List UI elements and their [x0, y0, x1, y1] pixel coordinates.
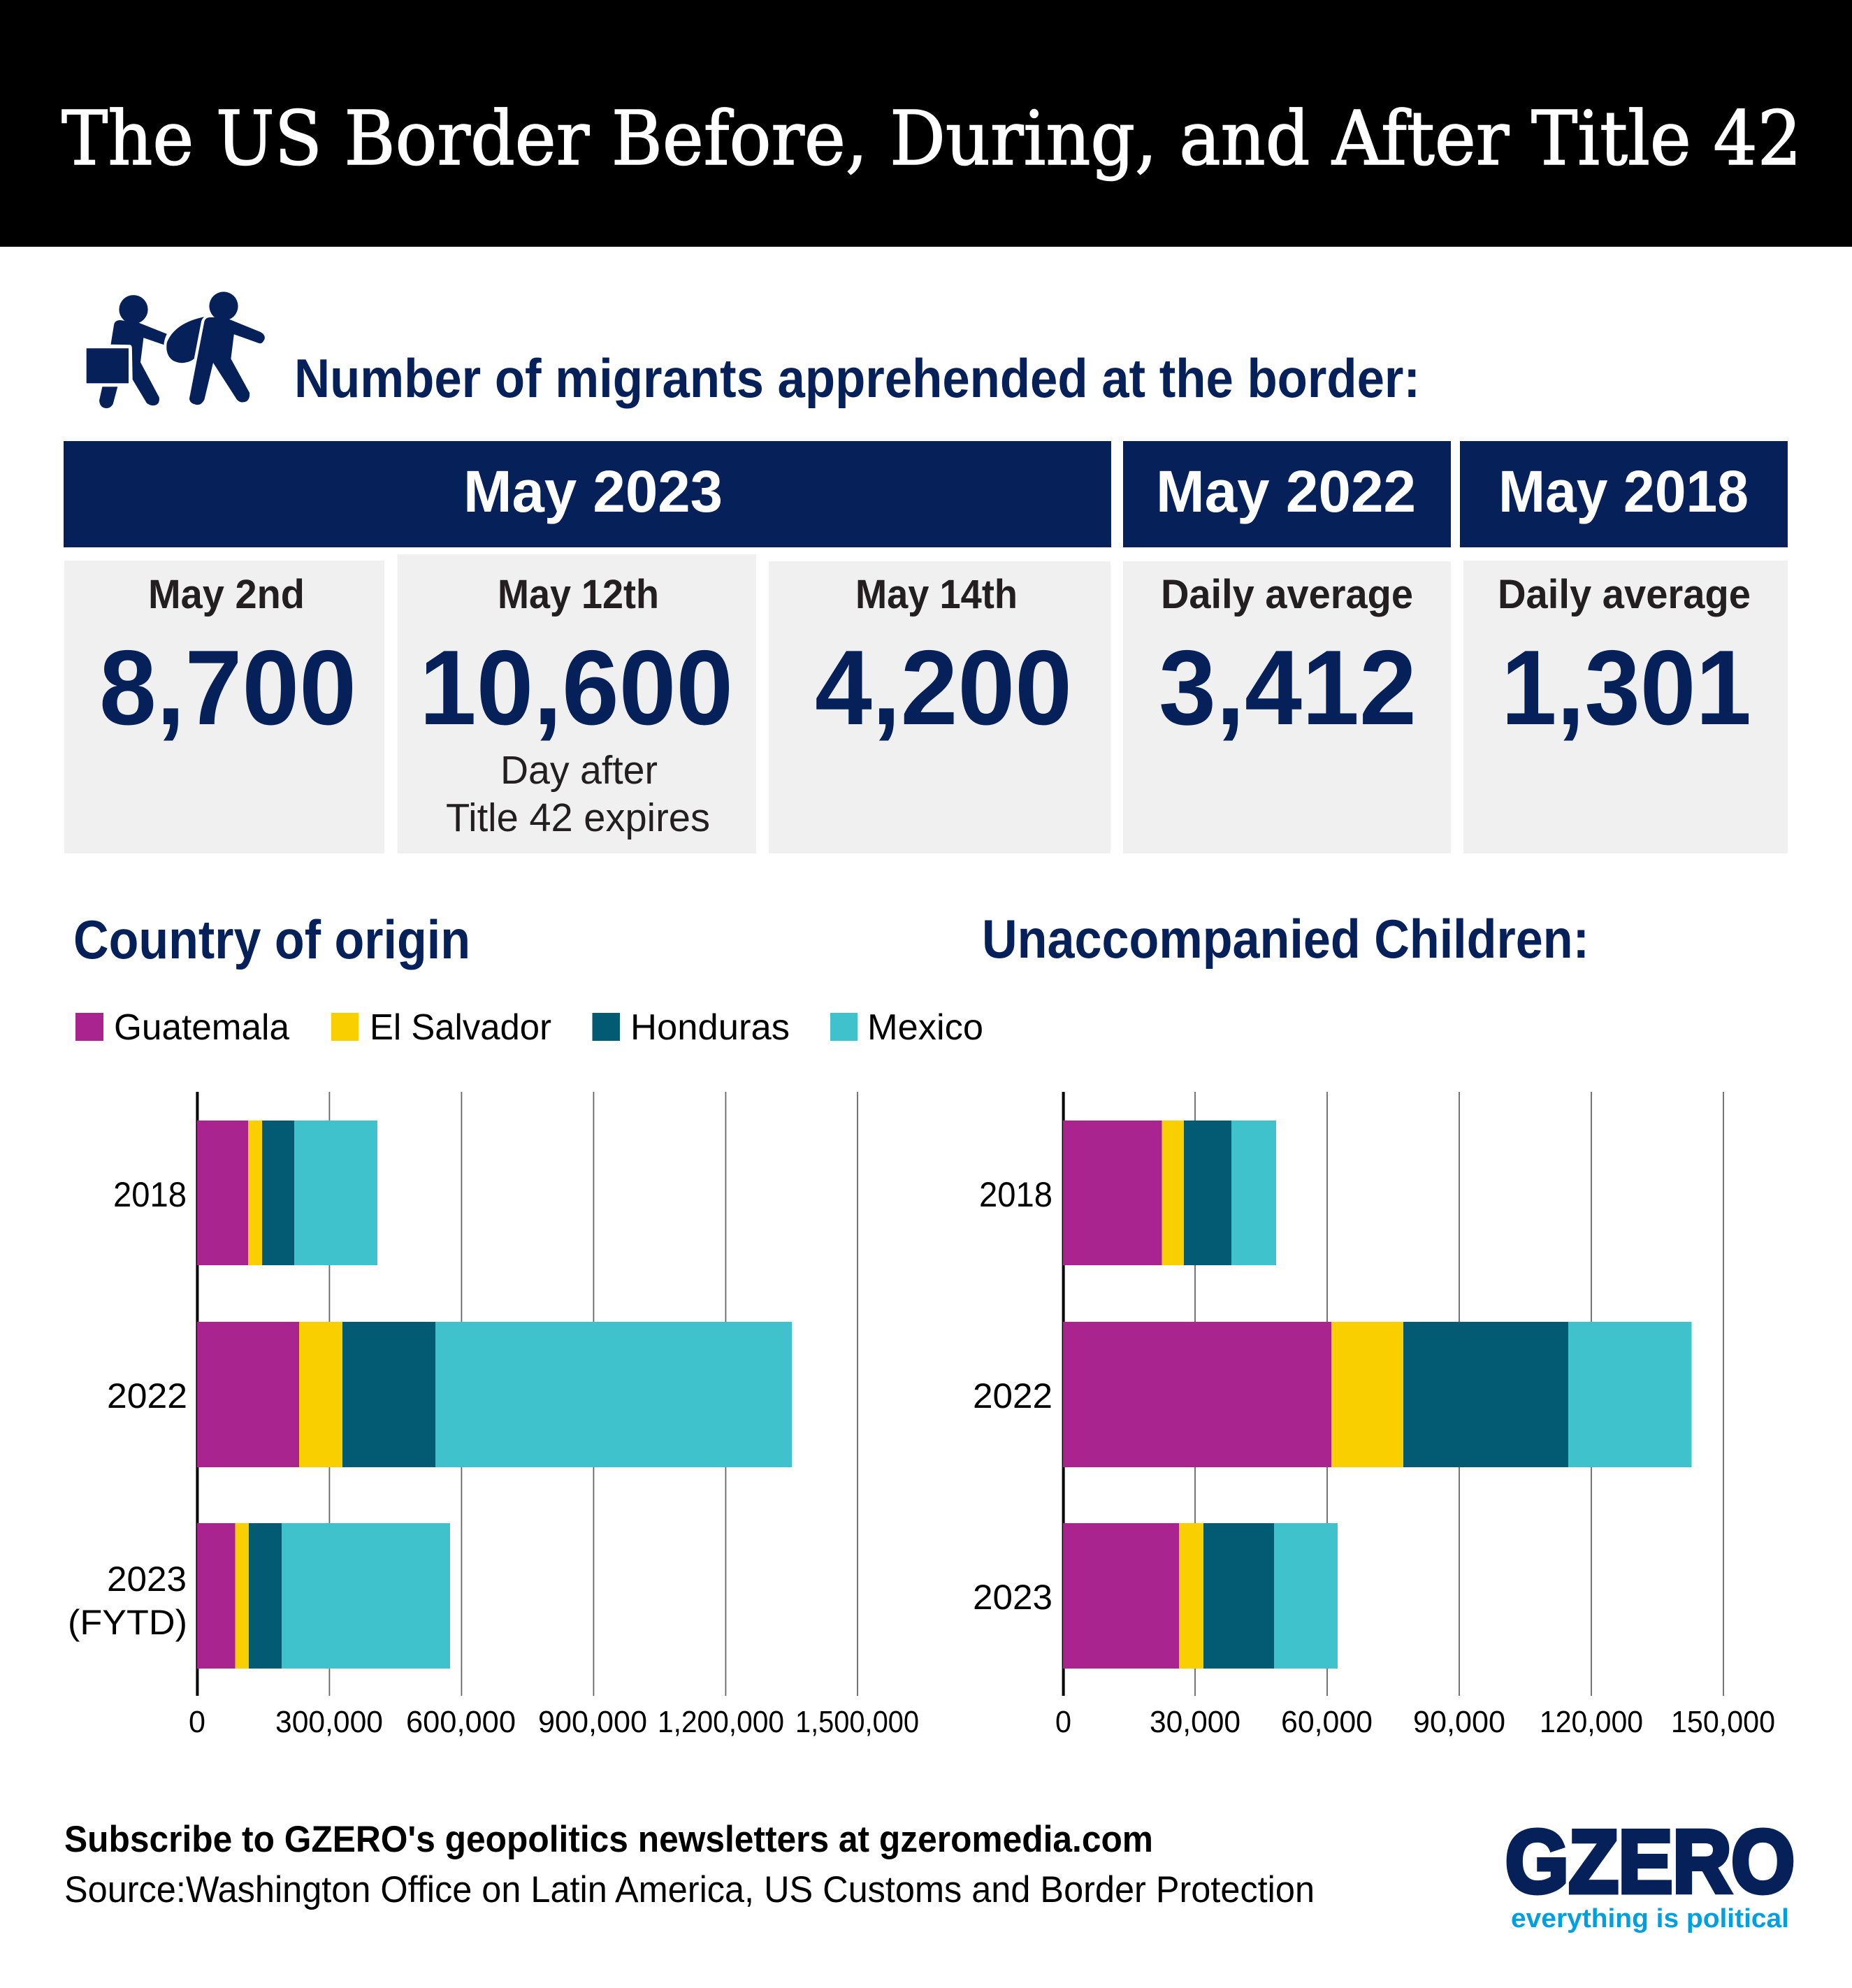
column header: May 2022: May 2022	[1156, 459, 1416, 524]
stat card: May 14th: 4,200	[815, 628, 1072, 747]
x axis labels: 120,000	[1540, 1705, 1643, 1739]
stat card: May 12th: Day after	[500, 748, 658, 793]
stat card: May 2nd	[64, 561, 384, 853]
stat card: May 2022 daily average	[1123, 561, 1451, 853]
stat card: May 12th: 10,600	[419, 628, 733, 747]
x axis labels: 1,500,000	[795, 1705, 919, 1739]
x axis labels: 900,000	[538, 1705, 647, 1739]
source line: Source:Washington Office on Latin America, US Customs and Border Protection	[64, 1869, 1315, 1910]
stat card: May 2nd: May 2nd	[148, 572, 305, 617]
x axis labels: 0	[189, 1705, 205, 1739]
year labels: 2022	[973, 1376, 1052, 1416]
x axis labels	[189, 1705, 919, 1739]
bar: 2018	[197, 1121, 377, 1265]
x axis labels: 30,000	[1150, 1705, 1240, 1739]
x axis labels	[1055, 1705, 1775, 1739]
year labels	[973, 1175, 1052, 1617]
year labels: 2023	[973, 1578, 1052, 1617]
year labels	[68, 1175, 187, 1642]
year labels: 2023	[107, 1560, 187, 1599]
subscribe line: Subscribe to GZERO's geopolitics newsletters at gzeromedia.com	[64, 1819, 1153, 1860]
year labels: 2022	[107, 1376, 187, 1416]
x axis labels: 0	[1055, 1705, 1071, 1739]
stat card: May 2018 daily average: 1,301	[1501, 628, 1751, 747]
column header: May 2023: May 2023	[463, 459, 723, 524]
heading: unaccompanied children: Unaccompanied Children:	[982, 908, 1589, 970]
chart: unaccompanied children stacked bars	[973, 1092, 1775, 1739]
header band	[0, 0, 1852, 247]
bar: 2018	[1063, 1121, 1276, 1265]
heading: number of migrants: Number of migrants apprehended at the border:	[294, 347, 1420, 409]
x axis labels: 60,000	[1281, 1705, 1373, 1739]
stat card: May 2018 daily average	[1463, 561, 1788, 853]
legend	[75, 1007, 983, 1048]
stat card: May 2022 daily average: Daily average	[1161, 572, 1413, 617]
x axis labels: 300,000	[275, 1705, 383, 1739]
legend: El Salvador	[370, 1007, 551, 1048]
column header: May 2022	[1123, 441, 1451, 547]
bar: 2023	[1063, 1523, 1338, 1669]
stat card: May 14th	[769, 561, 1111, 853]
tagline: everything is political	[1511, 1904, 1789, 1933]
column header: May 2018	[1460, 441, 1788, 547]
stat card: May 2018 daily average: Daily average	[1498, 572, 1751, 617]
bar: 2022	[1063, 1322, 1691, 1467]
stat card: May 12th: May 12th	[498, 572, 659, 617]
chart: country of origin stacked bars	[68, 1092, 919, 1739]
heading: country of origin: Country of origin	[73, 909, 470, 970]
x axis labels: 1,200,000	[658, 1705, 784, 1739]
year labels: (FYTD)	[68, 1603, 187, 1642]
logo: GZERO: GZERO	[1505, 1812, 1795, 1911]
legend: Mexico	[867, 1007, 983, 1048]
legend: Guatemala	[114, 1007, 289, 1048]
column header: May 2023	[64, 441, 1111, 547]
stat card: May 12th: Title 42 expires	[446, 795, 710, 840]
bar: 2022	[197, 1322, 792, 1467]
icon: two migrants carrying luggage	[87, 291, 265, 408]
stat card: May 2nd: 8,700	[99, 628, 356, 747]
x axis labels: 600,000	[406, 1705, 516, 1739]
legend: Honduras	[630, 1007, 790, 1048]
x axis labels: 90,000	[1413, 1705, 1505, 1739]
year labels: 2018	[979, 1175, 1052, 1214]
bar: 2023 FYTD	[197, 1523, 450, 1669]
x axis labels: 150,000	[1671, 1705, 1775, 1739]
year labels: 2018	[113, 1175, 187, 1214]
stat card: May 14th: May 14th	[855, 572, 1018, 617]
column header: May 2018: May 2018	[1498, 459, 1749, 524]
stat card: May 12th	[398, 554, 756, 853]
stat card: May 2022 daily average: 3,412	[1159, 628, 1417, 747]
